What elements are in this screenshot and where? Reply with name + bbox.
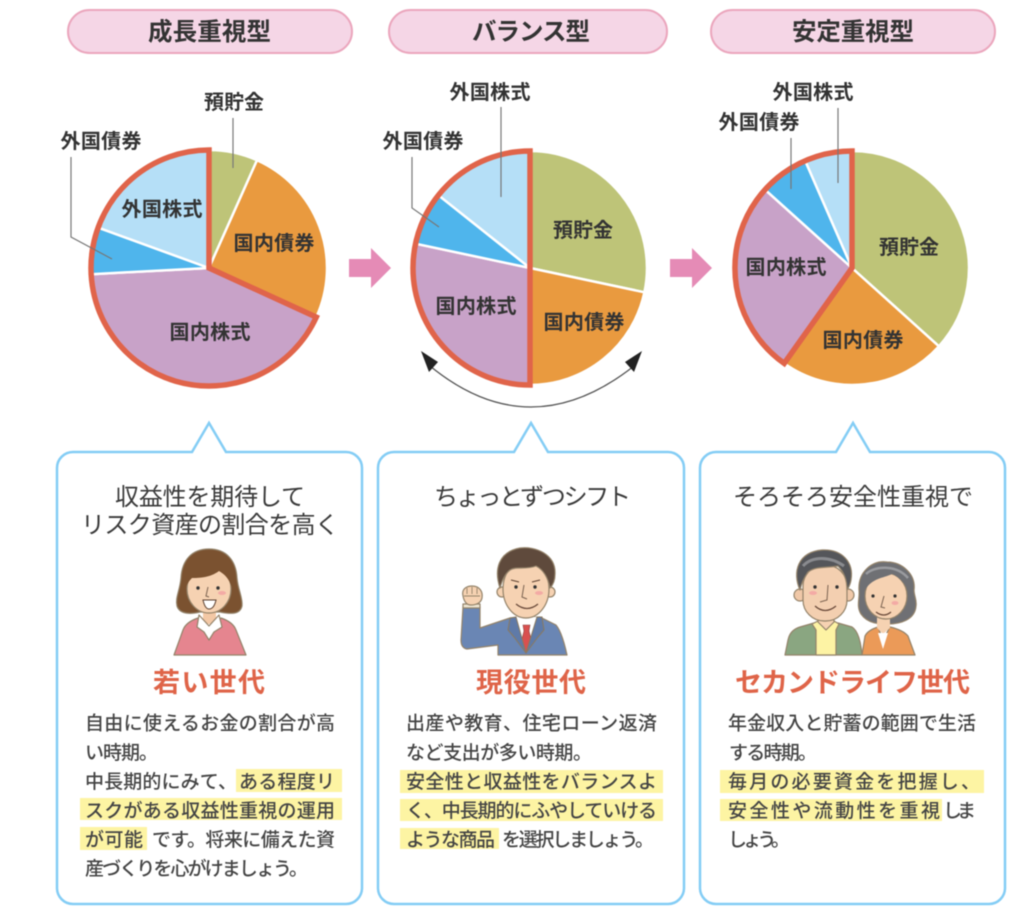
description: working: など支出が多い時期。 (406, 742, 592, 764)
panel heading: working: ちょっとずつシフト (434, 484, 631, 511)
description: working (400, 712, 663, 851)
panel: young generation (57, 423, 362, 904)
description: second-life: 毎月の必要資金を把握し、 (728, 771, 980, 793)
heading: balance type: バランス型 (472, 18, 590, 46)
pie chart: growth type: 外国株式 (122, 198, 202, 221)
pie chart: growth type (60, 91, 327, 386)
pie chart: stable type: 国内株式 (746, 256, 826, 279)
description: second-life: 年金収入と貯蓄の範囲で生活 (728, 712, 976, 734)
pie chart: growth type: 外国債券 (60, 130, 142, 153)
heading: stable type (711, 10, 995, 53)
pie chart: stable type (718, 81, 969, 385)
description: working: 出産や教育、住宅ローン返済 (406, 712, 657, 734)
panel: second-life generation (700, 423, 1005, 904)
description: second-life: しょう。 (728, 830, 790, 851)
description: young: 中長期的にみて、 (85, 771, 237, 793)
heading: balance type (389, 10, 667, 53)
pie chart: stable type: 預貯金 (879, 236, 939, 259)
panel heading: young (81, 484, 339, 539)
description: working: ような商品 (406, 829, 495, 851)
icon: elderly couple (785, 550, 916, 655)
heading: stable type: 安定重視型 (792, 18, 914, 46)
description: working: 安全性と収益性をバランスよ (406, 771, 657, 793)
pie chart: balance type: 外国株式 (450, 81, 530, 104)
arrow: curved double-headed shift (421, 351, 642, 407)
pie chart: stable type: 外国債券 (718, 111, 800, 134)
description: young: い時期。 (85, 742, 158, 764)
pie chart: balance type: 預貯金 (553, 219, 613, 242)
pie chart: growth type: 預貯金 (204, 91, 264, 114)
generation title: working: 現役世代 (476, 668, 586, 698)
pie chart: balance type: 外国債券 (382, 130, 464, 153)
panel: working generation (378, 423, 684, 904)
description: working: く、中長期的にふやしていける (406, 800, 657, 822)
pie chart: balance type (382, 81, 647, 385)
description: young: が可能 (85, 829, 143, 851)
generation title: second-life: セカンドライフ世代 (735, 668, 970, 698)
icon: businessman (461, 548, 567, 655)
description: second-life: しま (943, 801, 976, 822)
heading: growth type (68, 10, 352, 53)
description: young: スクがある収益性重視の運用 (85, 800, 335, 822)
arrow: balance to stable (670, 248, 712, 288)
description: second-life: 安全性や流動性を重視 (728, 800, 940, 822)
pie chart: stable type: 国内債券 (822, 329, 904, 352)
pie chart: balance type: 国内株式 (436, 295, 516, 318)
pie chart: stable type: 外国株式 (772, 81, 854, 104)
arrow: growth to balance (349, 248, 391, 288)
description: young: 産づくりを心がけましょう。 (85, 858, 308, 880)
panel heading: young: 収益性を期待して (115, 484, 305, 511)
pie chart: growth type: 国内債券 (234, 232, 314, 255)
description: second-life (720, 712, 984, 851)
icon: young woman (174, 549, 246, 655)
panel heading: young: リスク資産の割合を高く (81, 512, 339, 539)
pie chart: growth type: 国内株式 (170, 321, 250, 344)
description: working: を選択しましょう。 (502, 829, 654, 851)
pie chart: balance type: 国内債券 (544, 311, 624, 334)
heading: growth type: 成長重視型 (148, 18, 271, 46)
generation title: young: 若い世代 (153, 668, 265, 698)
description: young: です。将来に備えた資 (152, 829, 335, 851)
description: young (80, 712, 342, 880)
description: young: ある程度リ (239, 771, 335, 793)
description: young: 自由に使えるお金の割合が高 (85, 712, 335, 734)
panel heading: second-life: そろそろ安全性重視で (733, 484, 973, 511)
description: second-life: する時期。 (729, 742, 817, 764)
